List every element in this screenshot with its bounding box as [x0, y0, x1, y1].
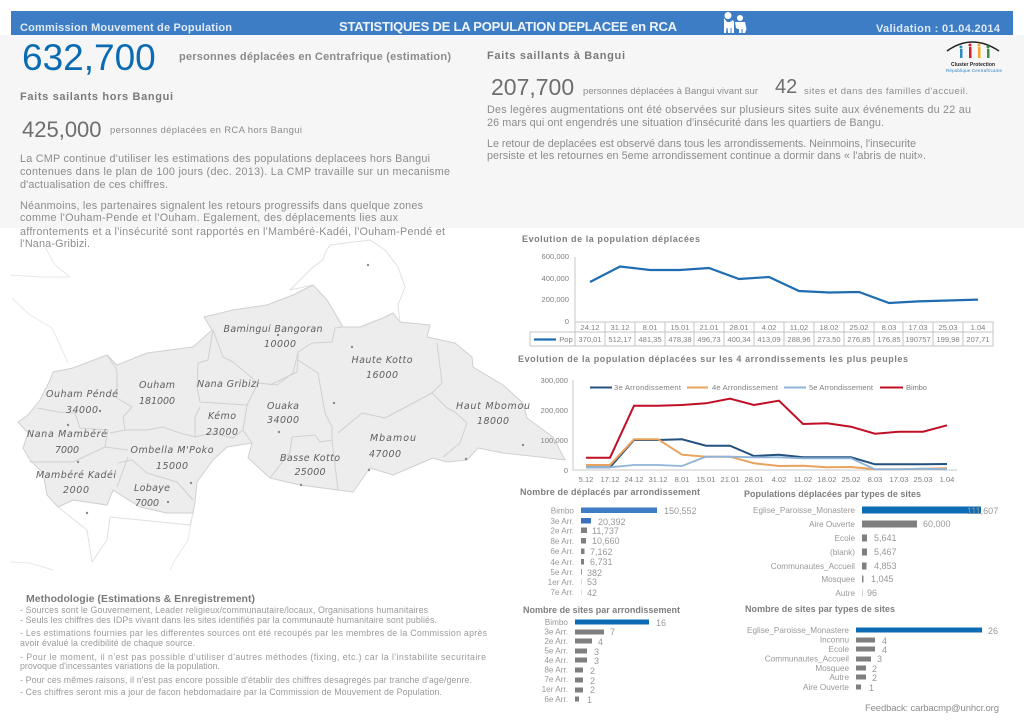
- data table: 207,71: [966, 335, 990, 344]
- data table: 15.01: [670, 323, 690, 332]
- text block: methodology: - Seuls les chiffres des IDPs vivant dans les sites identifiés par la communauté humanitaire sont publiés.: [20, 615, 437, 625]
- data table: 481,35: [638, 335, 662, 344]
- panel: key facts background: [0, 35, 1024, 228]
- heading: displaced by site type: Populations déplacées par types de sites: [744, 489, 921, 499]
- map region labels: 34000: [66, 405, 98, 416]
- text block: methodology: - Pour ces mêmes raisons, il n'est pas encore possible d'établir des chiffres desagregés par tranche d'age/genre.: [20, 675, 472, 685]
- data table: 273,50: [817, 335, 841, 344]
- line chart: displaced population: [530, 252, 993, 346]
- bar chart: displaced by site type: Mosquee: [821, 575, 855, 584]
- bar chart: displaced by arrondissement: Bimbo: [551, 506, 574, 516]
- text block: outside Bangui: Néanmoins, les partenaires signalent les retours progressifs dans quelque zones: [20, 200, 424, 212]
- bar chart: displaced by site type: Eglise_Paroisse_Monastere: [753, 506, 855, 515]
- map region labels: 25000: [294, 467, 326, 478]
- chart legend: Bimbo: [906, 383, 927, 392]
- bar chart: sites by arrondissement: 2: [590, 685, 595, 695]
- map region labels: 10000: [264, 339, 296, 350]
- line chart: four arrondissements: 200,000: [541, 406, 568, 415]
- data table: 190757: [905, 335, 931, 344]
- header banner: [11, 11, 1013, 35]
- bar chart: displaced by arrondissement: 4e Arr.: [550, 558, 574, 567]
- bar chart: sites by arrondissement: 3e Arr.: [544, 628, 568, 636]
- bar chart: sites by type: Inconnu: [820, 636, 849, 644]
- chart x axis labels: 15.01: [696, 475, 716, 484]
- bar chart: displaced by arrondissement: 5e Arr.: [550, 568, 574, 577]
- bar chart: displaced by arrondissement: [548, 506, 697, 598]
- line chart: displaced population: 200,000: [542, 295, 569, 304]
- heading: sites by arrondissement: Nombre de sites par arrondissement: [523, 605, 680, 615]
- map region labels: 7000: [135, 498, 159, 509]
- bar chart: displaced by site type: 5,641: [874, 533, 897, 543]
- chart legend: 5e Arrondissement: [809, 383, 874, 392]
- map region labels: Mbamou: [370, 433, 416, 444]
- map region labels: Ouham Péndé: [46, 389, 118, 400]
- logo: cluster protection: Cluster Protection: [951, 62, 995, 68]
- chart x axis labels: 25.03: [913, 475, 933, 484]
- map region labels: 7000: [55, 445, 79, 456]
- header banner: STATISTIQUES DE LA POPULATION DEPLACEE en RCA: [339, 19, 678, 34]
- bar chart: sites by arrondissement: Bimbo: [545, 618, 568, 627]
- bar chart: sites by type: [747, 626, 998, 693]
- chart legend: 4e Arrondissement: [712, 383, 779, 392]
- data table: 496,73: [697, 335, 721, 344]
- bar chart: sites by type: 3: [877, 654, 882, 664]
- map region labels: Ouaka: [267, 401, 299, 412]
- bar chart: sites by type: Mosquee: [815, 664, 849, 673]
- bar chart: sites by type: Ecole: [829, 645, 849, 654]
- chart x axis labels: 8.01: [675, 475, 689, 484]
- heading: displaced by arrondissement: Nombre de déplacés par arrondissement: [520, 487, 700, 497]
- text block: Bangui: personnes déplacées à Bangui vivant sur: [583, 86, 758, 97]
- text block: Bangui: 42: [775, 76, 797, 98]
- bar chart: displaced by site type: Ecole: [835, 534, 855, 543]
- map region labels: 15000: [156, 461, 188, 472]
- data table: 11.02: [790, 323, 808, 332]
- data table: 4.02: [762, 323, 776, 332]
- bar chart: sites by type: Autre: [829, 673, 849, 682]
- map region labels: 23000: [206, 427, 238, 438]
- chart x axis labels: 17.03: [889, 475, 909, 484]
- bar chart: displaced by site type: 96: [867, 588, 877, 598]
- text block: Bangui: 207,700: [491, 74, 574, 100]
- bar chart: sites by arrondissement: 16: [656, 618, 666, 628]
- text block: methodology: - Pour le moment, il n'est pas possible d'utiliser d'autres méthodes (fixing, etc.) car la l'instabilite securitaire: [20, 652, 486, 662]
- chart x axis labels: 31.12: [648, 475, 668, 484]
- line chart: four arrondissements: 300,000: [541, 376, 568, 385]
- bar chart: sites by type: Aire Ouverte: [803, 683, 849, 692]
- data table: 512,17: [608, 335, 632, 344]
- line chart: displaced population: 400,000: [542, 274, 569, 283]
- data table: 370,01: [578, 335, 602, 344]
- bar chart: sites by arrondissement: 8e Arr.: [544, 666, 568, 674]
- bar chart: sites by arrondissement: [542, 618, 666, 705]
- logo: cluster protection: [946, 42, 1002, 73]
- bar chart: sites by type: Communautes_Accueil: [765, 654, 849, 664]
- chart x axis labels: 11.02: [794, 475, 812, 484]
- data table: 276,85: [847, 335, 871, 344]
- text block: outside Bangui: affrontements et a l'insécurité sont rapportés en l'Mambéré-Kadéi, l'Ouham-Pendé et: [20, 226, 445, 238]
- bar chart: displaced by site type: 60,000: [923, 519, 951, 529]
- data table: 25.03: [938, 323, 958, 332]
- bar chart: sites by arrondissement: 4: [598, 637, 603, 647]
- chart legend: [590, 383, 927, 392]
- text block: outside Bangui: La CMP continue d'utiliser les estimations des populations deplacees hors Bangui: [20, 153, 430, 165]
- data table: 199,98: [936, 335, 960, 344]
- bar chart: sites by type: 2: [872, 673, 877, 683]
- text block: methodology: provoque d'incessantes variations de la population.: [20, 661, 220, 671]
- data table: 288,96: [787, 335, 811, 344]
- header banner: Commission Mouvement de Population: [20, 22, 232, 34]
- bar chart: sites by arrondissement: 1er Arr.: [542, 685, 568, 694]
- data table: 24.12: [580, 323, 600, 332]
- map region labels: Ombella M'Poko: [130, 445, 214, 456]
- data table: 25.02: [849, 323, 869, 332]
- bar chart: displaced by site type: 5,467: [874, 547, 897, 557]
- text block: outside Bangui: 425,000: [22, 117, 102, 142]
- text block: methodology: avoir évalué la credibilité de chaque source.: [20, 638, 195, 648]
- header banner: Validation : 01.04.2014: [876, 23, 1001, 35]
- bar chart: sites by arrondissement: 3: [594, 656, 599, 666]
- data table: 28.01: [729, 323, 749, 332]
- data table: 413,09: [757, 335, 781, 344]
- text block: methodology: Methodologie (Estimations & Enregistrement): [26, 593, 255, 605]
- data table: 8.03: [882, 323, 896, 332]
- bar chart: sites by arrondissement: 2e Arr.: [544, 637, 568, 646]
- text block: outside Bangui: [20, 91, 450, 250]
- data table: 400,34: [727, 335, 751, 344]
- text block: Bangui: Des legères augmentations ont été observées sur plusieurs sites suite aux événements du 22 au: [487, 104, 971, 116]
- bar chart: displaced by site type: Communautes_Accueil: [771, 562, 855, 571]
- key figure: total displaced: 632,700: [22, 37, 156, 78]
- bar chart: displaced by site type: Autre: [835, 589, 855, 598]
- bar chart: sites by arrondissement: 2: [590, 666, 595, 676]
- text block: outside Bangui: comme l'Ouham-Pende et l'Ouham. Egalement, des déplacements lies aux: [20, 212, 399, 224]
- data table: 18.02: [819, 323, 839, 332]
- bar chart: sites by arrondissement: 4e Arr.: [544, 656, 568, 665]
- map region labels: 47000: [369, 449, 401, 460]
- text block: methodology: - Les estimations fournies par les differentes sources ont été recoupés par les membres de la Commission après: [20, 628, 488, 638]
- data table: 21.01: [699, 323, 719, 332]
- map region labels: Mambéré Kadéi: [36, 470, 116, 481]
- map region labels: Haute Kotto: [352, 355, 413, 366]
- text block: outside Bangui: l'Nana-Gribizi.: [20, 238, 90, 250]
- map region labels: Nana Gribizi: [197, 379, 259, 390]
- map region labels: 18000: [477, 416, 509, 427]
- text block: outside Bangui: personnes déplacées en RCA hors Bangui: [110, 125, 302, 136]
- text block: methodology: [20, 593, 488, 697]
- bar chart: displaced by arrondissement: 7,162: [590, 547, 613, 557]
- text block: Bangui: [487, 50, 971, 162]
- bar chart: sites by type: Eglise_Paroisse_Monastere: [747, 626, 849, 635]
- bar chart: displaced by site type: (blank): [830, 548, 855, 557]
- chart x axis labels: 21.01: [720, 475, 740, 484]
- line chart: four arrondissements: [541, 376, 957, 484]
- bar chart: displaced by arrondissement: 3e Arr.: [550, 517, 574, 526]
- heading: sites by type: Nombre de sites par types de sites: [745, 604, 895, 614]
- bar chart: sites by arrondissement: 3: [594, 647, 599, 657]
- bar chart: displaced by arrondissement: 8e Arr.: [550, 537, 574, 546]
- map region labels: Lobaye: [134, 483, 170, 494]
- key figure: total displaced: [22, 37, 451, 78]
- bar chart: sites by type: 2: [872, 664, 877, 674]
- text block: Bangui: Faits saillants à Bangui: [487, 50, 625, 62]
- data table: 176,85: [877, 335, 901, 344]
- data table: [530, 322, 993, 346]
- bar chart: displaced by site type: 1,045: [871, 574, 894, 584]
- data table: 8.01: [643, 323, 657, 332]
- chart x axis labels: 25.02: [841, 475, 861, 484]
- feedback contact: Feedback: carbacmp@unhcr.org: [865, 703, 999, 714]
- chart x axis labels: [579, 475, 954, 484]
- bar chart: sites by type: 4: [882, 636, 887, 646]
- bar chart: sites by arrondissement: 7: [610, 627, 615, 637]
- bar chart: sites by arrondissement: 7e Arr.: [544, 675, 568, 684]
- bar chart: sites by arrondissement: 1: [587, 695, 592, 705]
- map: Central African Republic: [10, 240, 565, 570]
- map region labels: 34000: [267, 415, 299, 426]
- bar chart: displaced by site type: Aire Ouverte: [809, 520, 855, 529]
- text block: Bangui: 26 mars qui ont engendrés une situation d'insécurité dans les quartiers de Bangu.: [487, 117, 884, 129]
- bar chart: displaced by site type: [753, 506, 998, 598]
- text block: methodology: - Ces chiffres seront mis a jour de facon hebdomadaire par la Commission de Mouvement de Population.: [20, 687, 442, 697]
- bar chart: sites by type: 26: [988, 626, 998, 636]
- key figure: total displaced: personnes déplacées en Centrafrique (estimation): [179, 51, 451, 63]
- line chart: four arrondissements: 0: [564, 466, 568, 475]
- map region labels: Bamingui Bangoran: [224, 324, 322, 335]
- data table: 31.12: [610, 323, 630, 332]
- bar chart: sites by type: 1: [869, 683, 874, 693]
- text block: outside Bangui: contenues dans le plan de 100 jours (dec. 2013). La CMP travaille sur un mecanisme: [20, 166, 450, 178]
- map region labels: Basse Kotto: [280, 453, 340, 464]
- bar chart: sites by arrondissement: 5e Arr.: [544, 646, 568, 656]
- text block: Bangui: sites et dans des familles d'accueil.: [804, 86, 968, 97]
- map region labels: 16000: [366, 370, 398, 381]
- data table: Pop: [559, 335, 573, 344]
- bar chart: displaced by arrondissement: 2e Arr.: [550, 526, 574, 536]
- line chart: displaced population: 0: [565, 317, 569, 326]
- bar chart: displaced by site type: 4,853: [874, 561, 897, 571]
- bar chart: sites by type: 4: [882, 645, 887, 655]
- logo: cluster protection: République Centrafricaine: [946, 68, 1002, 73]
- bar chart: displaced by arrondissement: 150,552: [664, 506, 697, 516]
- bar chart: displaced by arrondissement: 1er Arr.: [548, 578, 574, 587]
- bar chart: displaced by site type: 111,607: [967, 506, 998, 516]
- data table: 1.04: [971, 323, 985, 332]
- bar chart: displaced by arrondissement: 53: [587, 577, 597, 587]
- icon: displaced people: [724, 12, 746, 33]
- map region labels: 2000: [63, 485, 89, 496]
- line chart: four arrondissements: 100,000: [541, 436, 568, 445]
- text block: outside Bangui: d'actualisation de ces chiffres.: [20, 179, 168, 191]
- chart x axis labels: 18.02: [817, 475, 837, 484]
- bar chart: displaced by arrondissement: 20,392: [598, 517, 626, 527]
- heading: population evolution: Evolution de la population déplacées: [522, 234, 700, 244]
- chart x axis labels: 4.02: [772, 475, 786, 484]
- map region labels: 181000: [139, 396, 175, 407]
- map region labels: Ouham: [139, 380, 175, 391]
- heading: arrondissements evolution: Evolution de la population déplacées sur les 4 arrondissements les plus peuples: [518, 354, 908, 364]
- bar chart: displaced by arrondissement: 11,737: [592, 526, 619, 536]
- bar chart: sites by arrondissement: 2: [590, 676, 595, 686]
- map region labels: [27, 324, 530, 509]
- chart x axis labels: 24.12: [624, 475, 644, 484]
- text block: methodology: - Sources sont le Gouvernement, Leader religieux/communautaire/locaux, Organisations humanitaires: [20, 605, 429, 615]
- bar chart: displaced by arrondissement: 382: [587, 568, 602, 578]
- chart x axis labels: 1.04: [940, 475, 954, 484]
- map region labels: Nana Mambéré: [27, 429, 107, 440]
- map settlement dots: [67, 264, 524, 514]
- chart legend: 3e Arrondissement: [614, 383, 682, 392]
- text block: outside Bangui: Faits sailants hors Bangui: [20, 91, 173, 103]
- chart x axis labels: 8.03: [868, 475, 882, 484]
- text block: Bangui: persiste et les retournes en 5eme arrondissement continue a dormir dans « l'abris de nuit».: [487, 150, 926, 162]
- chart x axis labels: 5.12: [579, 475, 593, 484]
- bar chart: displaced by arrondissement: 42: [587, 588, 597, 598]
- chart x axis labels: 17.12: [600, 475, 620, 484]
- map region labels: Kémo: [208, 411, 236, 422]
- text block: Bangui: Le retour de deplacées est observé dans tous les arrondissements. Neinmoins, l'insecurite: [487, 138, 916, 150]
- bar chart: displaced by arrondissement: 7e Arr.: [550, 588, 574, 597]
- chart x axis labels: 28.01: [744, 475, 764, 484]
- data table: 478,38: [668, 335, 692, 344]
- bar chart: displaced by arrondissement: 6,731: [590, 557, 613, 567]
- bar chart: displaced by arrondissement: 6e Arr.: [550, 547, 574, 556]
- data table: 17.03: [908, 323, 928, 332]
- bar chart: displaced by arrondissement: 10,660: [592, 536, 620, 546]
- map region labels: Haut Mbomou: [456, 401, 530, 412]
- line chart: displaced population: 600,000: [542, 252, 569, 261]
- bar chart: sites by arrondissement: 6e Arr.: [544, 695, 568, 704]
